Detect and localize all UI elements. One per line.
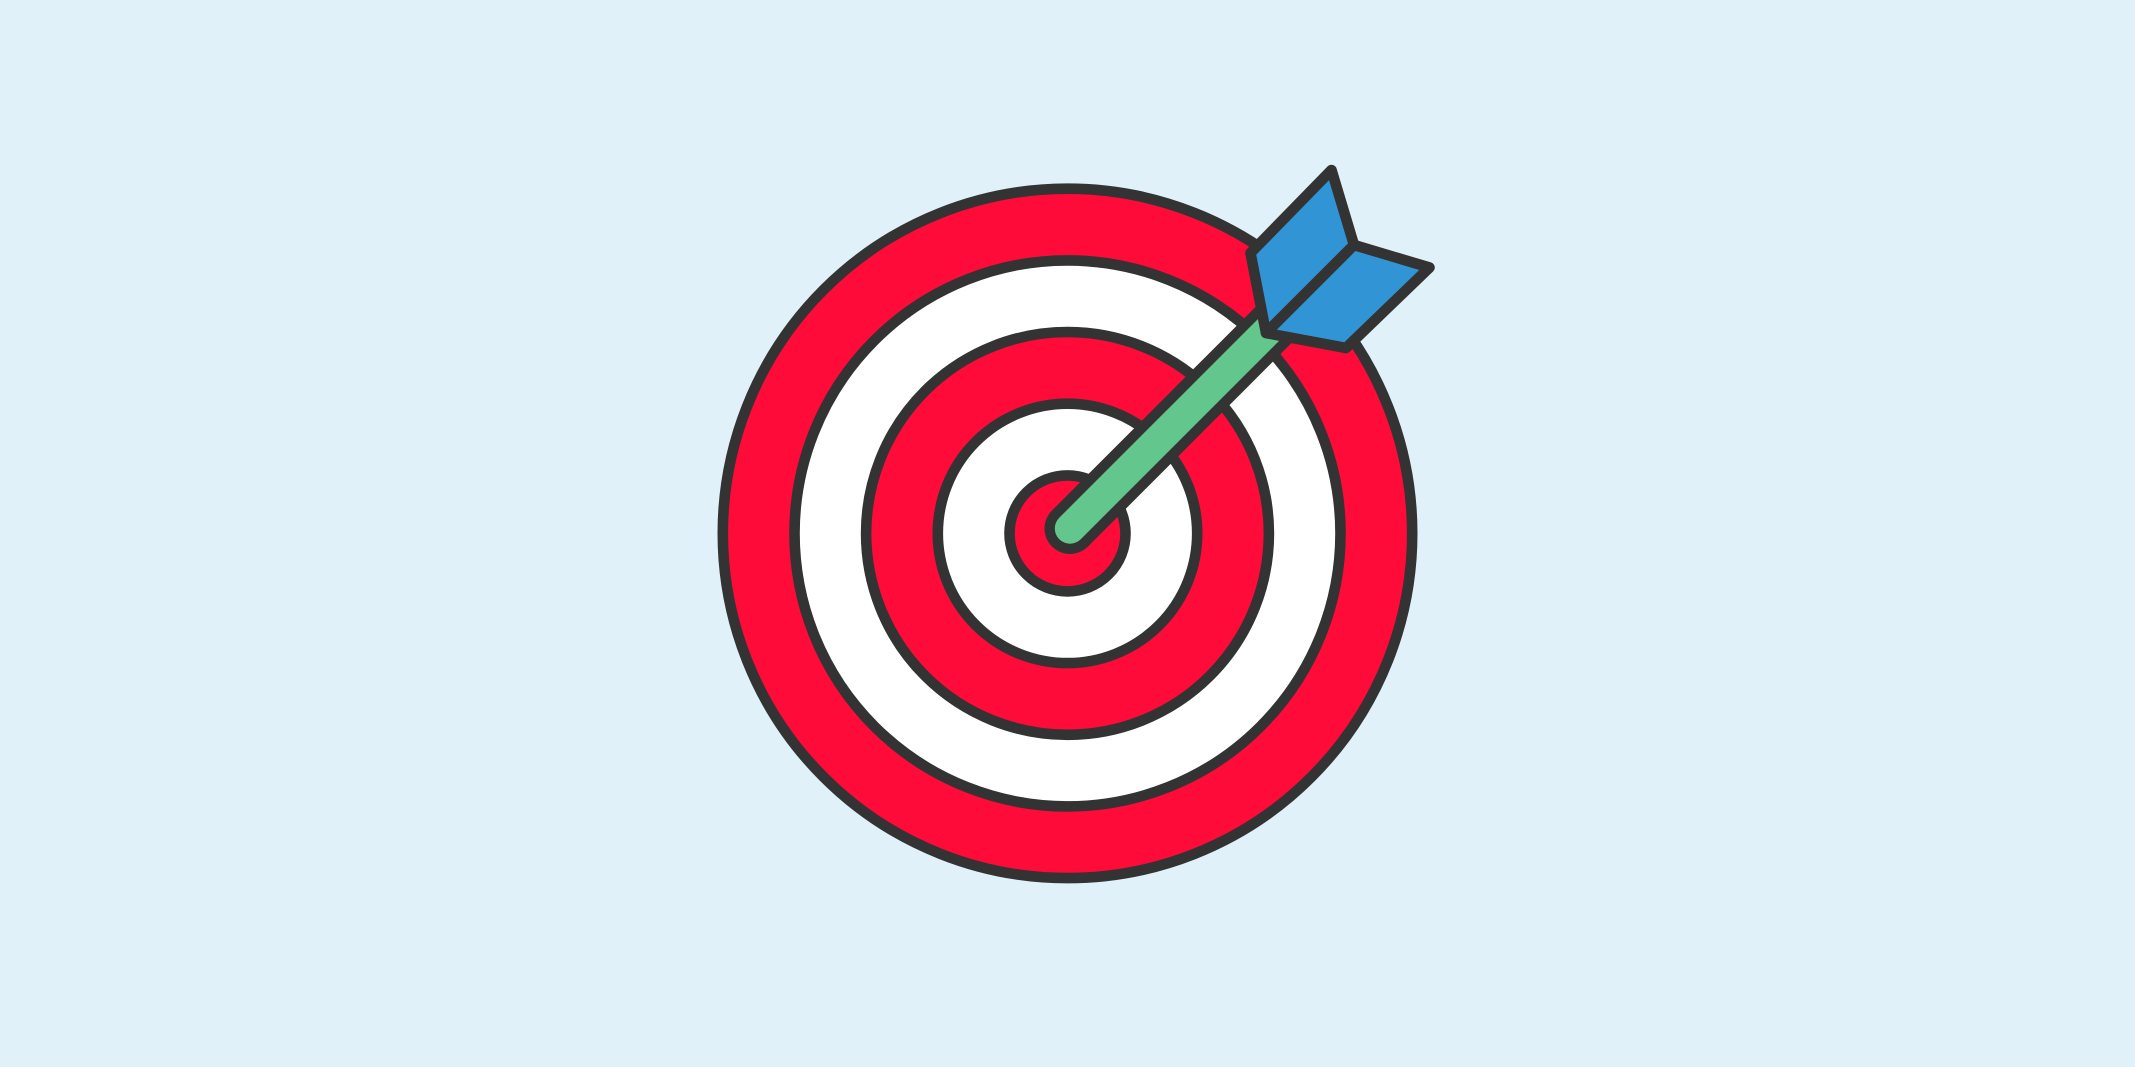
- target: concentric rings: [723, 189, 1412, 878]
- dart shaft fill: [1070, 298, 1300, 528]
- ring 5: red bullseye: [1010, 475, 1126, 591]
- dart: [1070, 170, 1430, 528]
- lower feather: [1266, 245, 1430, 348]
- upper feather: [1250, 170, 1354, 333]
- ring 3: red: [866, 332, 1269, 735]
- dart shaft outline: [1070, 298, 1300, 528]
- ring 4: white: [938, 404, 1197, 663]
- ring 1: outer red: [723, 189, 1412, 878]
- ring 2: white: [794, 260, 1340, 806]
